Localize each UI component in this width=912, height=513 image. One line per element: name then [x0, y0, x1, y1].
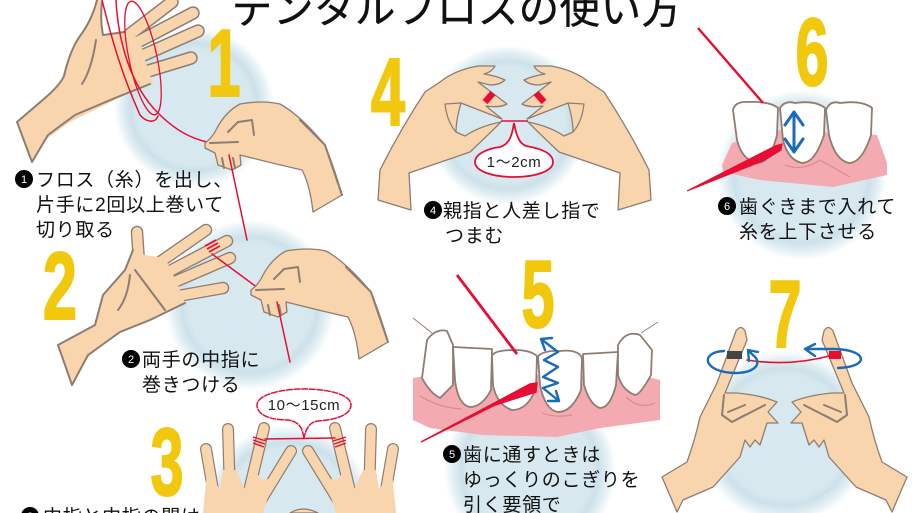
right pinching hand — [522, 66, 651, 210]
panel: step 1 — [15, 0, 342, 241]
caption 5 — [443, 444, 640, 513]
blue double arrow — [785, 112, 803, 152]
caption 4 — [424, 200, 601, 247]
number 4: 4 — [371, 39, 405, 146]
wrist gap shape — [290, 509, 318, 513]
number 1: 1 — [207, 9, 241, 116]
number 6: 6 — [795, 0, 829, 105]
panel: step 7 — [662, 260, 907, 512]
panel: step 4 — [371, 39, 651, 247]
caption 5: ゆっくりのこぎりを — [463, 469, 640, 491]
panel: step 5 — [413, 240, 660, 513]
right hand — [308, 428, 396, 513]
number 3: 3 — [150, 408, 184, 513]
callout 10-15cm: 10～15cm — [268, 397, 340, 414]
floss — [421, 275, 537, 442]
gums — [722, 130, 887, 187]
lower teeth — [413, 318, 658, 412]
number 7: 7 — [768, 260, 802, 367]
gum marks — [420, 396, 655, 416]
floss span — [265, 438, 335, 439]
left hand pointing up — [662, 328, 778, 512]
panel: step 3 — [21, 389, 396, 513]
caption 6: 糸を上下させる — [739, 221, 877, 243]
black and red finger bands — [727, 351, 841, 359]
panel: step 6 — [687, 0, 896, 243]
floss span — [747, 355, 833, 363]
caption 1: 1 — [21, 174, 27, 186]
gum marks — [785, 160, 850, 177]
gums — [413, 375, 660, 437]
right hand pointing up — [791, 328, 907, 512]
callout 10-15cm — [257, 389, 351, 438]
caption 2: 巻きつける — [142, 374, 241, 396]
upper teeth — [733, 102, 872, 163]
floss span — [501, 120, 528, 122]
caption 5: 歯に通すときは — [463, 444, 601, 466]
floss — [687, 28, 782, 191]
caption 4: 親指と人差し指で — [443, 200, 601, 222]
caption 1: フロス（糸）を出し、 — [36, 169, 233, 191]
caption 1: 片手に2回以上巻いて — [36, 194, 224, 216]
caption 2 — [122, 349, 260, 396]
caption 1: 切り取る — [36, 219, 115, 241]
left pinching hand — [378, 66, 507, 210]
caption 1 — [15, 169, 233, 241]
panel: step 2 — [43, 230, 388, 396]
caption 4: 4 — [430, 205, 436, 217]
caption 6: 歯ぐきまで入れて — [739, 196, 896, 218]
right hand holding floss — [251, 249, 388, 362]
number 5: 5 — [521, 240, 555, 347]
blue zigzag arrow — [541, 338, 559, 401]
callout 1-2cm: 1～2cm — [487, 154, 541, 171]
callout 1-2cm — [475, 123, 553, 177]
caption 4: つまむ — [445, 226, 504, 247]
right hand holding floss — [205, 102, 342, 240]
rotation arrows — [708, 344, 861, 373]
caption 2: 両手の中指に — [142, 349, 260, 371]
caption 5: 5 — [449, 449, 455, 461]
number 2: 2 — [43, 233, 77, 340]
caption 6 — [718, 196, 896, 243]
caption 2: 2 — [128, 354, 134, 366]
caption 6: 6 — [724, 201, 730, 213]
left open hand with wound floss — [58, 230, 258, 385]
left hand — [203, 428, 291, 513]
left hand with floss loops — [17, 0, 207, 162]
